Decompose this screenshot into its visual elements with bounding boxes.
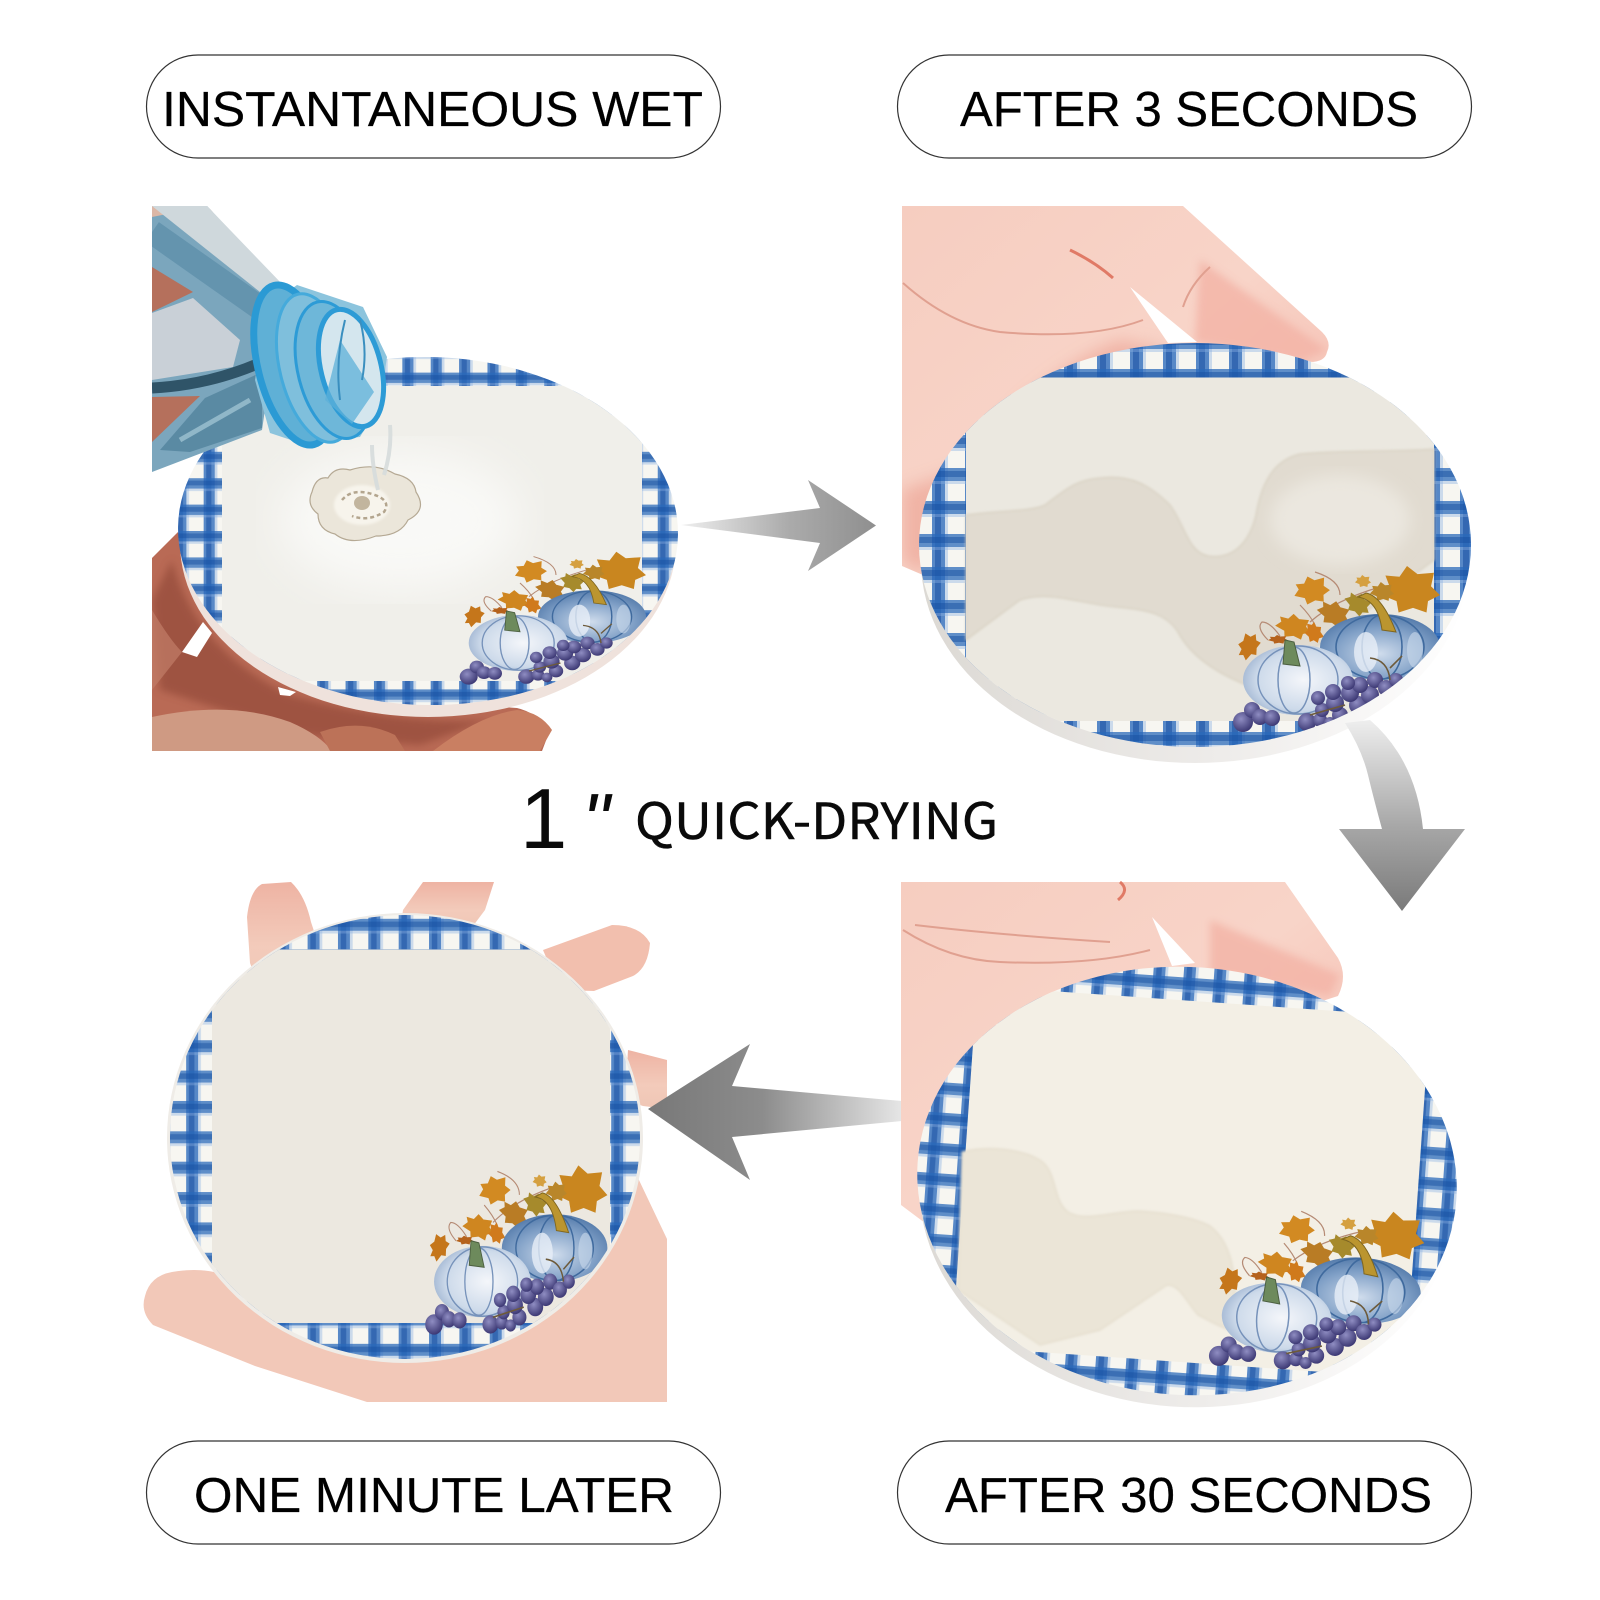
water stain: [958, 1149, 1235, 1345]
water stain: [966, 449, 1434, 684]
pill label: after 3 seconds: [898, 55, 1472, 158]
pumpkin artwork: [460, 552, 646, 685]
panel: one minute later photo: [144, 882, 667, 1402]
pumpkin artwork: [1233, 566, 1440, 732]
coaster side: [180, 369, 676, 717]
hand under coaster: [152, 532, 552, 751]
hand holding coaster: [144, 882, 667, 1402]
central heading: 1: [520, 772, 567, 867]
pill label: instantaneous wet: INSTANTANEOUS WET: [162, 83, 703, 137]
central heading: ": [582, 777, 613, 865]
hand holding coaster: [901, 882, 1343, 1223]
arrow: curved down: [1339, 720, 1465, 911]
water puddle: [310, 467, 420, 541]
coaster face: [910, 340, 1480, 750]
pumpkin artwork: [425, 1165, 607, 1335]
coaster face: [170, 350, 690, 720]
pumpkin artwork: [1208, 1210, 1424, 1370]
pill label: one minute later: ONE MINUTE LATER: [194, 1469, 674, 1523]
water stream: [372, 425, 390, 490]
pill label: instantaneous wet: [146, 55, 720, 158]
coaster rim: [167, 913, 643, 1363]
hand holding coaster: [902, 206, 1329, 578]
pill label: after 30 seconds: AFTER 30 SECONDS: [945, 1469, 1432, 1523]
coaster side: [921, 359, 1469, 763]
coaster face: [917, 966, 1457, 1396]
pill label: after 30 seconds: [898, 1441, 1472, 1544]
fingers behind bottle: [152, 206, 220, 300]
pill label: after 3 seconds: AFTER 3 SECONDS: [960, 83, 1418, 137]
bottle: [152, 206, 395, 472]
panel: instantaneous wet photo: [152, 206, 690, 751]
arrow: to one minute later: [648, 1044, 902, 1180]
panel: after 30 seconds photo: [901, 882, 1475, 1425]
coaster side: [905, 961, 1469, 1425]
coaster face: [165, 910, 645, 1365]
panel: after 3 seconds photo: [902, 206, 1480, 763]
arrow: to after 3 seconds: [681, 480, 876, 571]
central heading: QUICK-DRYING: [635, 782, 998, 854]
pill label: one minute later: [146, 1441, 720, 1544]
central heading: [520, 772, 998, 867]
